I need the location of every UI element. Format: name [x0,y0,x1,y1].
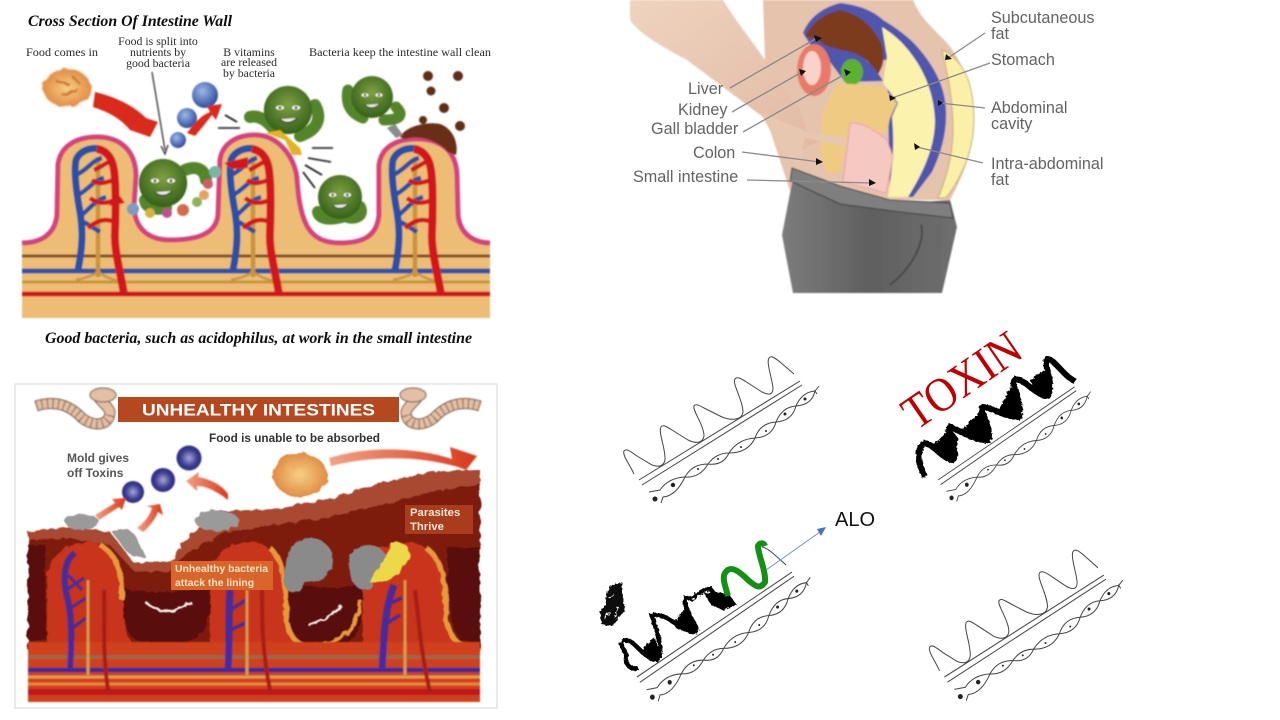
diagram: wall being cleared [600,509,875,701]
label: food unable: Food is unable to be absorbed [209,432,380,445]
label: intra-abdominal fat: fat [991,171,1010,189]
blue under liver [827,53,883,82]
banner: UNHEALTHY INTESTINES [142,402,375,420]
horizontal bands [28,657,480,692]
banner [118,397,399,422]
colon and stomach [820,84,897,173]
torso illustration [630,0,974,293]
food arrow [93,92,158,137]
callout: parasites thrive: Thrive [410,521,444,533]
large arrow [329,447,477,470]
arrow to ALO [766,527,826,570]
illustration: damaged tissue [28,470,480,650]
toxin spheres [122,446,202,503]
pink lining [22,135,490,243]
grey mold clumps [65,511,239,558]
label: b vitamins: B vitamins [223,45,275,59]
panel: unhealthy intestines [15,384,497,708]
label: bacteria keep clean: Bacteria keep the intestine wall clean [309,45,491,59]
label: liver: Liver [688,80,724,98]
illustration: base layers and veins [28,446,480,702]
label: food comes in: Food comes in [26,45,98,59]
label: subcutaneous fat: Subcutaneous [991,9,1095,27]
label: gall bladder: Gall bladder [651,120,739,138]
label: small intestine: Small intestine [633,168,738,186]
label: stomach: Stomach [991,51,1055,69]
remaining villus [762,547,786,565]
bacterium resting [318,175,362,219]
orange arrows [95,472,228,532]
food blob [273,453,327,497]
wall lines [938,387,1091,502]
labels [26,13,491,347]
subcutaneous fat [938,50,974,198]
title: Cross Section Of Intestine Wall [28,13,233,30]
green toxin being removed [724,543,765,596]
bacterium splitting food [139,159,206,209]
body skin [763,0,974,200]
label: abdominal cavity: cavity [991,115,1033,133]
label: mold gives off toxins: Mold gives [67,451,129,465]
label: b vitamins: by bacteria [223,66,276,80]
white worms [145,602,342,625]
toxin label: TOXIN [892,321,1032,440]
organ labels right [991,9,1103,189]
lumen pockets [28,545,480,643]
label: food is split: Food is split into [118,34,198,48]
orange rims [100,545,480,650]
abdominal cavity [803,3,946,197]
hand over [763,113,847,163]
frame [15,384,497,708]
label: mold gives off toxins: off Toxins [67,466,124,480]
panel: cross section of intestine wall [22,13,491,347]
bacterium on villus [250,86,318,136]
kidney [797,44,831,96]
toxin coating [919,359,1075,477]
panel: villi diagrams [600,321,1123,701]
label: subcutaneous fat: fat [991,25,1010,43]
release arrow [187,104,222,136]
label: ALO: ALO [835,509,875,531]
pocket [890,225,922,285]
vitamin balls [170,82,218,148]
villi [47,542,470,650]
label: abdominal cavity: Abdominal [991,99,1068,117]
diagram: toxin-coated wall [892,321,1091,502]
horizontal vessels [22,256,490,294]
base tissue [28,470,480,650]
illustration: mold and parasites [65,453,410,625]
caption: Good bacteria, such as acidophilus, at work in the small intestine [45,330,472,347]
label: colon: Colon [693,144,735,162]
belt [790,168,953,218]
nutrient necklace [127,166,221,218]
impact lines [218,115,333,188]
callout: parasites thrive [405,505,473,534]
villus blood vessels [75,148,441,294]
arrowheads [799,35,952,186]
pants [782,183,957,293]
tissue fill [22,135,490,318]
small intestine [843,123,893,193]
gall bladder [841,59,863,85]
liver [805,10,884,76]
wall lines [637,572,810,701]
label: food is split: nutrients by [130,45,186,59]
label: food is split: good bacteria [126,56,191,70]
small red arrows [224,157,248,169]
yellow damage [370,542,410,583]
callout: unhealthy bacteria: attack the lining [175,578,254,589]
illustration: healthy intestine wall [22,69,490,318]
callout: unhealthy bacteria: Unhealthy bacteria [175,564,268,575]
leader lines [730,33,990,183]
intra-abdominal fat [882,27,935,197]
worm left [36,388,116,424]
yellow scrap [265,130,302,155]
panel: abdominal anatomy [630,0,1103,293]
arm [630,0,847,163]
callout: parasites thrive: Parasites [410,507,460,519]
purple and tan veins [65,553,430,692]
callout: unhealthy bacteria [171,561,273,590]
brown debris [400,71,465,155]
label: intra-abdominal fat: Intra-abdominal [991,155,1103,173]
scraper [387,124,403,138]
crust layer [28,470,480,572]
detached mold clump [600,582,625,626]
base layer [28,642,480,702]
food blob [43,69,91,107]
grey parasites [284,538,388,593]
organ labels left [633,80,739,186]
toxin remnants [622,588,737,668]
label: kidney: Kidney [678,101,728,119]
label: b vitamins: are released [221,55,277,69]
diagram: restored wall [929,550,1123,701]
diagram: clean wall top [624,357,819,503]
bacterium cleaning [347,76,400,120]
worm right [400,388,480,424]
pointer arrow [152,72,168,154]
